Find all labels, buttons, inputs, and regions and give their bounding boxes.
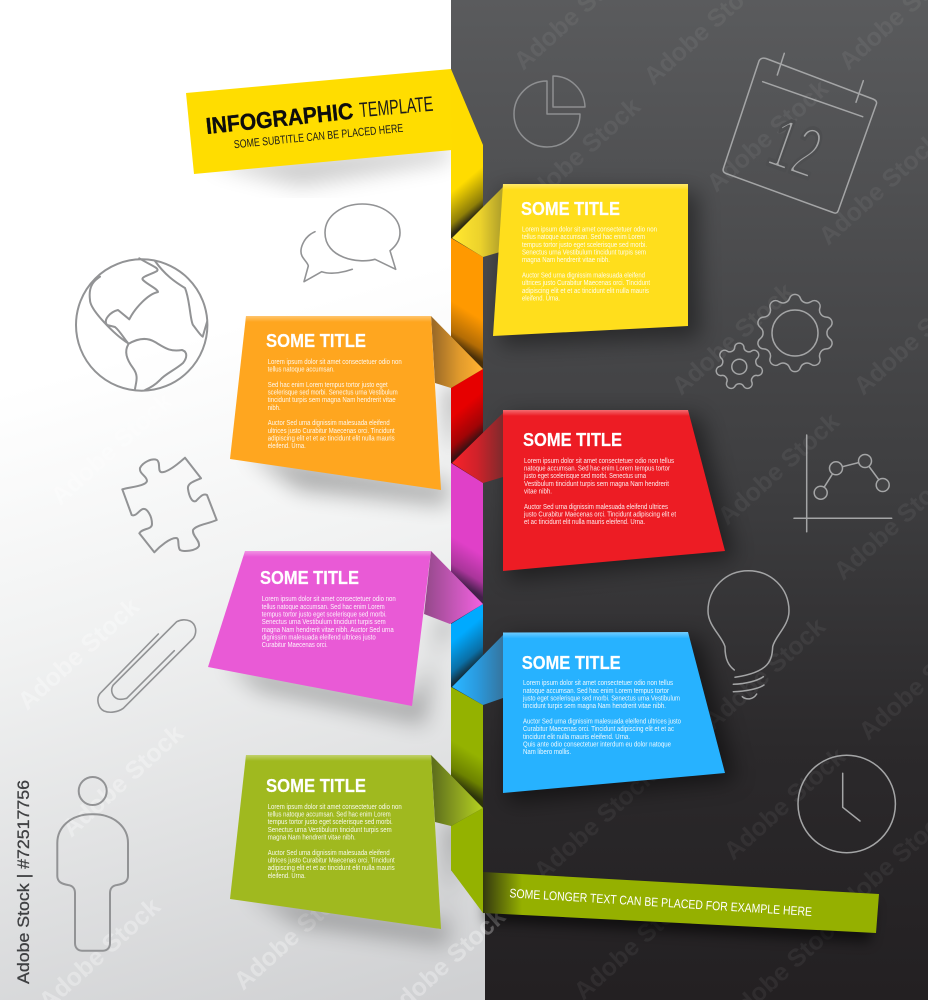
body text [522, 226, 657, 302]
column segment: yellow [451, 69, 483, 257]
column segment: blue [451, 604, 483, 705]
watermark on light side: Adobe Stock [57, 719, 189, 843]
title: template: TEMPLATE [358, 93, 434, 122]
watermark on dark side: Adobe Stock [514, 92, 646, 216]
body text: Lorem ipsum dolor sit amet consectetuer odio non tellus [524, 458, 674, 465]
watermark on light side: Adobe Stock [164, 97, 296, 221]
title ribbon [186, 69, 452, 174]
body text: Curabitur Maecenas orci. Tincidunt adipiscing elit et et ac [523, 726, 674, 733]
fold arrow: yellow [452, 187, 503, 257]
watermark on dark side: Adobe Stock [719, 742, 851, 866]
watermark on dark side: Adobe Stock [699, 612, 831, 736]
icon: pie chart [514, 76, 585, 147]
icon: gears [716, 294, 832, 388]
body text: Senectus urna Vestibulum tincidunt turpis sem [522, 250, 646, 256]
vertical credit text: Adobe Stock | #72517756 [14, 780, 33, 984]
body text: Curabitur Maecenas orci. [262, 642, 328, 649]
body text: magna Nam hendrerit vitae nibh. [268, 834, 356, 842]
heading: SOME TITLE [521, 198, 620, 219]
watermark on light side: Adobe Stock [13, 592, 145, 716]
timeline column [451, 69, 483, 913]
body text: Lorem ipsum dolor sit amet consectetuer odio non [522, 226, 657, 234]
body text: ultrices justo Curabitur Maecenas orci. Tincidunt [268, 858, 395, 864]
body text: scelerisque sed morbi. Senectus urna Vestibulum [268, 390, 398, 396]
watermark on light side: Adobe Stock [44, 57, 176, 181]
body text: ultrices justo Curabitur Maecenas orci. Tincidunt [522, 280, 650, 287]
body text: ultrices justo Curabitur Maecenas orci. Tincidunt [268, 428, 395, 435]
column segment: red [451, 369, 483, 483]
body text: Nam libero mollis. [523, 749, 571, 756]
icon: light bulb [708, 571, 789, 699]
icon: clock [798, 755, 895, 853]
body text: Quis ante odio consectetuer interdum eu dolor natoque [523, 742, 671, 748]
body text: tincidunt turpis sem magna Nam hendrerit vitae nibh. [523, 703, 666, 710]
panel: red card [452, 410, 725, 571]
watermark on dark side: Adobe Stock [713, 407, 845, 531]
body text: Vestibulum tincidunt turpis sem magna Nam hendrerit [524, 481, 669, 488]
body text: nibh. [268, 405, 281, 412]
icon: person [57, 777, 128, 951]
body text: Auctor Sed urna dignissim malesuada eleifend [522, 272, 645, 280]
panel: blue card [452, 632, 725, 793]
body text: Auctor Sed urna dignissim malesuada eleifend [268, 420, 390, 427]
body text: tincidunt turpis sem magna Nam hendrerit vitae [268, 397, 396, 404]
icon: line chart [794, 435, 892, 532]
body text: justo Curabitur Maecenas orci. Tincidunt adipiscing elit et [523, 512, 676, 518]
body text [523, 458, 676, 526]
body text: eleifend. Urna. [268, 873, 306, 880]
watermark on dark side [509, 0, 928, 1000]
shadows on dark side [485, 190, 875, 942]
icon: globe [76, 258, 207, 391]
icon: puzzle piece [122, 458, 217, 552]
body text: justo eget scelerisque sed morbi. Senectus urna Vestibulum [522, 696, 680, 702]
body text: magna Nam hendrerit vitae nibh. [522, 257, 610, 264]
body text: dignissim malesuada eleifend ultrices justo [262, 634, 376, 642]
fold arrow: magenta [424, 551, 483, 624]
heading: SOME TITLE [522, 652, 621, 673]
body text: eleifend. Urna. [522, 296, 560, 302]
watermark on light side [0, 0, 511, 1000]
watermark on light side: Adobe Stock [46, 387, 178, 511]
body text: Auctor Sed urna dignissim malesuada eleifend ultrices justo [523, 718, 681, 726]
body text: Senectus urna Vestibulum tincidunt turpis sem [268, 827, 392, 834]
heading: SOME TITLE [523, 429, 622, 450]
column segment: green [451, 687, 483, 913]
title: infographic: INFOGRAPHIC [205, 98, 354, 139]
footer text: SOME LONGER TEXT CAN BE PLACED FOR EXAMPLE HERE [509, 886, 812, 919]
watermark on light side: Adobe Stock [1, 259, 133, 383]
background: dark right side [451, 0, 928, 1000]
fold arrow: green [431, 755, 483, 826]
body text: Lorem ipsum dolor sit amet consectetuer odio non [268, 359, 402, 366]
body text: adipiscing elit et et ac tincidunt elit nulla mauris [522, 288, 649, 295]
panel: orange card [230, 316, 483, 490]
watermark on dark side: Adobe Stock [529, 762, 661, 886]
column segment: orange [451, 238, 483, 388]
fold arrow: blue [452, 635, 503, 705]
body text: Senectus urna Vestibulum tincidunt turpis sem [262, 619, 386, 626]
watermark on dark side: Adobe Stock [702, 74, 834, 198]
body text: tellus natoque accumsan. Sed hac enim Lorem [262, 604, 385, 611]
body text: Auctor Sed urna dignissim malesuada eleifend ultrices [524, 504, 668, 511]
body text: Lorem ipsum dolor sit amet consectetuer odio non [262, 596, 396, 603]
panel: magenta card [208, 551, 483, 706]
body text: Lorem ipsum dolor sit amet consectetuer odio non [268, 804, 402, 811]
body text: Auctor Sed urna dignissim malesuada eleifend [268, 850, 390, 857]
panel: yellow card [452, 184, 688, 336]
panel: green card [230, 755, 483, 929]
body text: tellus natoque accumsan. [268, 366, 335, 374]
body text: eleifend. Urna. [268, 443, 306, 450]
body text [522, 680, 681, 756]
background: light left side [0, 0, 486, 1000]
body text: adipiscing elit et et ac tincidunt elit nulla mauris [268, 436, 395, 442]
body text [262, 596, 396, 649]
footer ribbon [483, 872, 879, 933]
heading: SOME TITLE [266, 775, 366, 796]
icon: paperclip [98, 620, 196, 712]
body text: adipiscing elit et et ac tincidunt elit nulla mauris [268, 865, 395, 872]
body text: natoque accumsan. Sed hac enim Lorem tempus tortor [524, 466, 671, 472]
body text: tellus natoque accumsan. Sed hac enim Lorem [522, 234, 645, 241]
body text: magna Nam hendrerit vitae nibh. Auctor Sed urna [262, 627, 394, 634]
fold arrow: red [452, 413, 503, 483]
heading: SOME TITLE [266, 330, 366, 351]
body text: et ac tincidunt elit nulla mauris eleifend. Urna. [524, 519, 645, 526]
subtitle: SOME SUBTITLE CAN BE PLACED HERE [233, 123, 404, 151]
body text: Lorem ipsum dolor sit amet consectetuer odio non tellus [523, 680, 673, 687]
heading: SOME TITLE [260, 567, 359, 588]
body text: justo eget scelerisque sed morbi. Senectus urna [523, 473, 646, 480]
shadows on light side [205, 146, 466, 945]
icon: calendar: 12 [759, 103, 831, 194]
column segment: magenta [451, 463, 483, 624]
watermark on light side: Adobe Stock [229, 872, 361, 996]
body text: tempus tortor justo eget scelerisque sed morbi. [268, 819, 393, 826]
body text: vitae nibh. [524, 488, 552, 496]
body text: natoque accumsan. Sed hac enim Lorem tempus tortor [523, 688, 670, 695]
body text: tincidunt elit nulla mauris eleifend. Urna. [523, 734, 630, 741]
body text: Sed hac enim Lorem tempus tortor justo eget [268, 382, 388, 389]
icon: calendar [723, 53, 877, 213]
fold arrow: orange [431, 316, 483, 388]
icon: speech bubbles [301, 204, 400, 282]
body text [268, 804, 402, 880]
watermark on dark side: Adobe Stock [667, 277, 799, 401]
body text: tempus tortor justo eget scelerisque sed morbi. [262, 612, 387, 618]
body text [268, 359, 402, 450]
body text: tempus tortor justo eget scelerisque sed morbi. [522, 242, 647, 249]
body text: tellus natoque accumsan. Sed hac enim Lorem [268, 812, 391, 818]
